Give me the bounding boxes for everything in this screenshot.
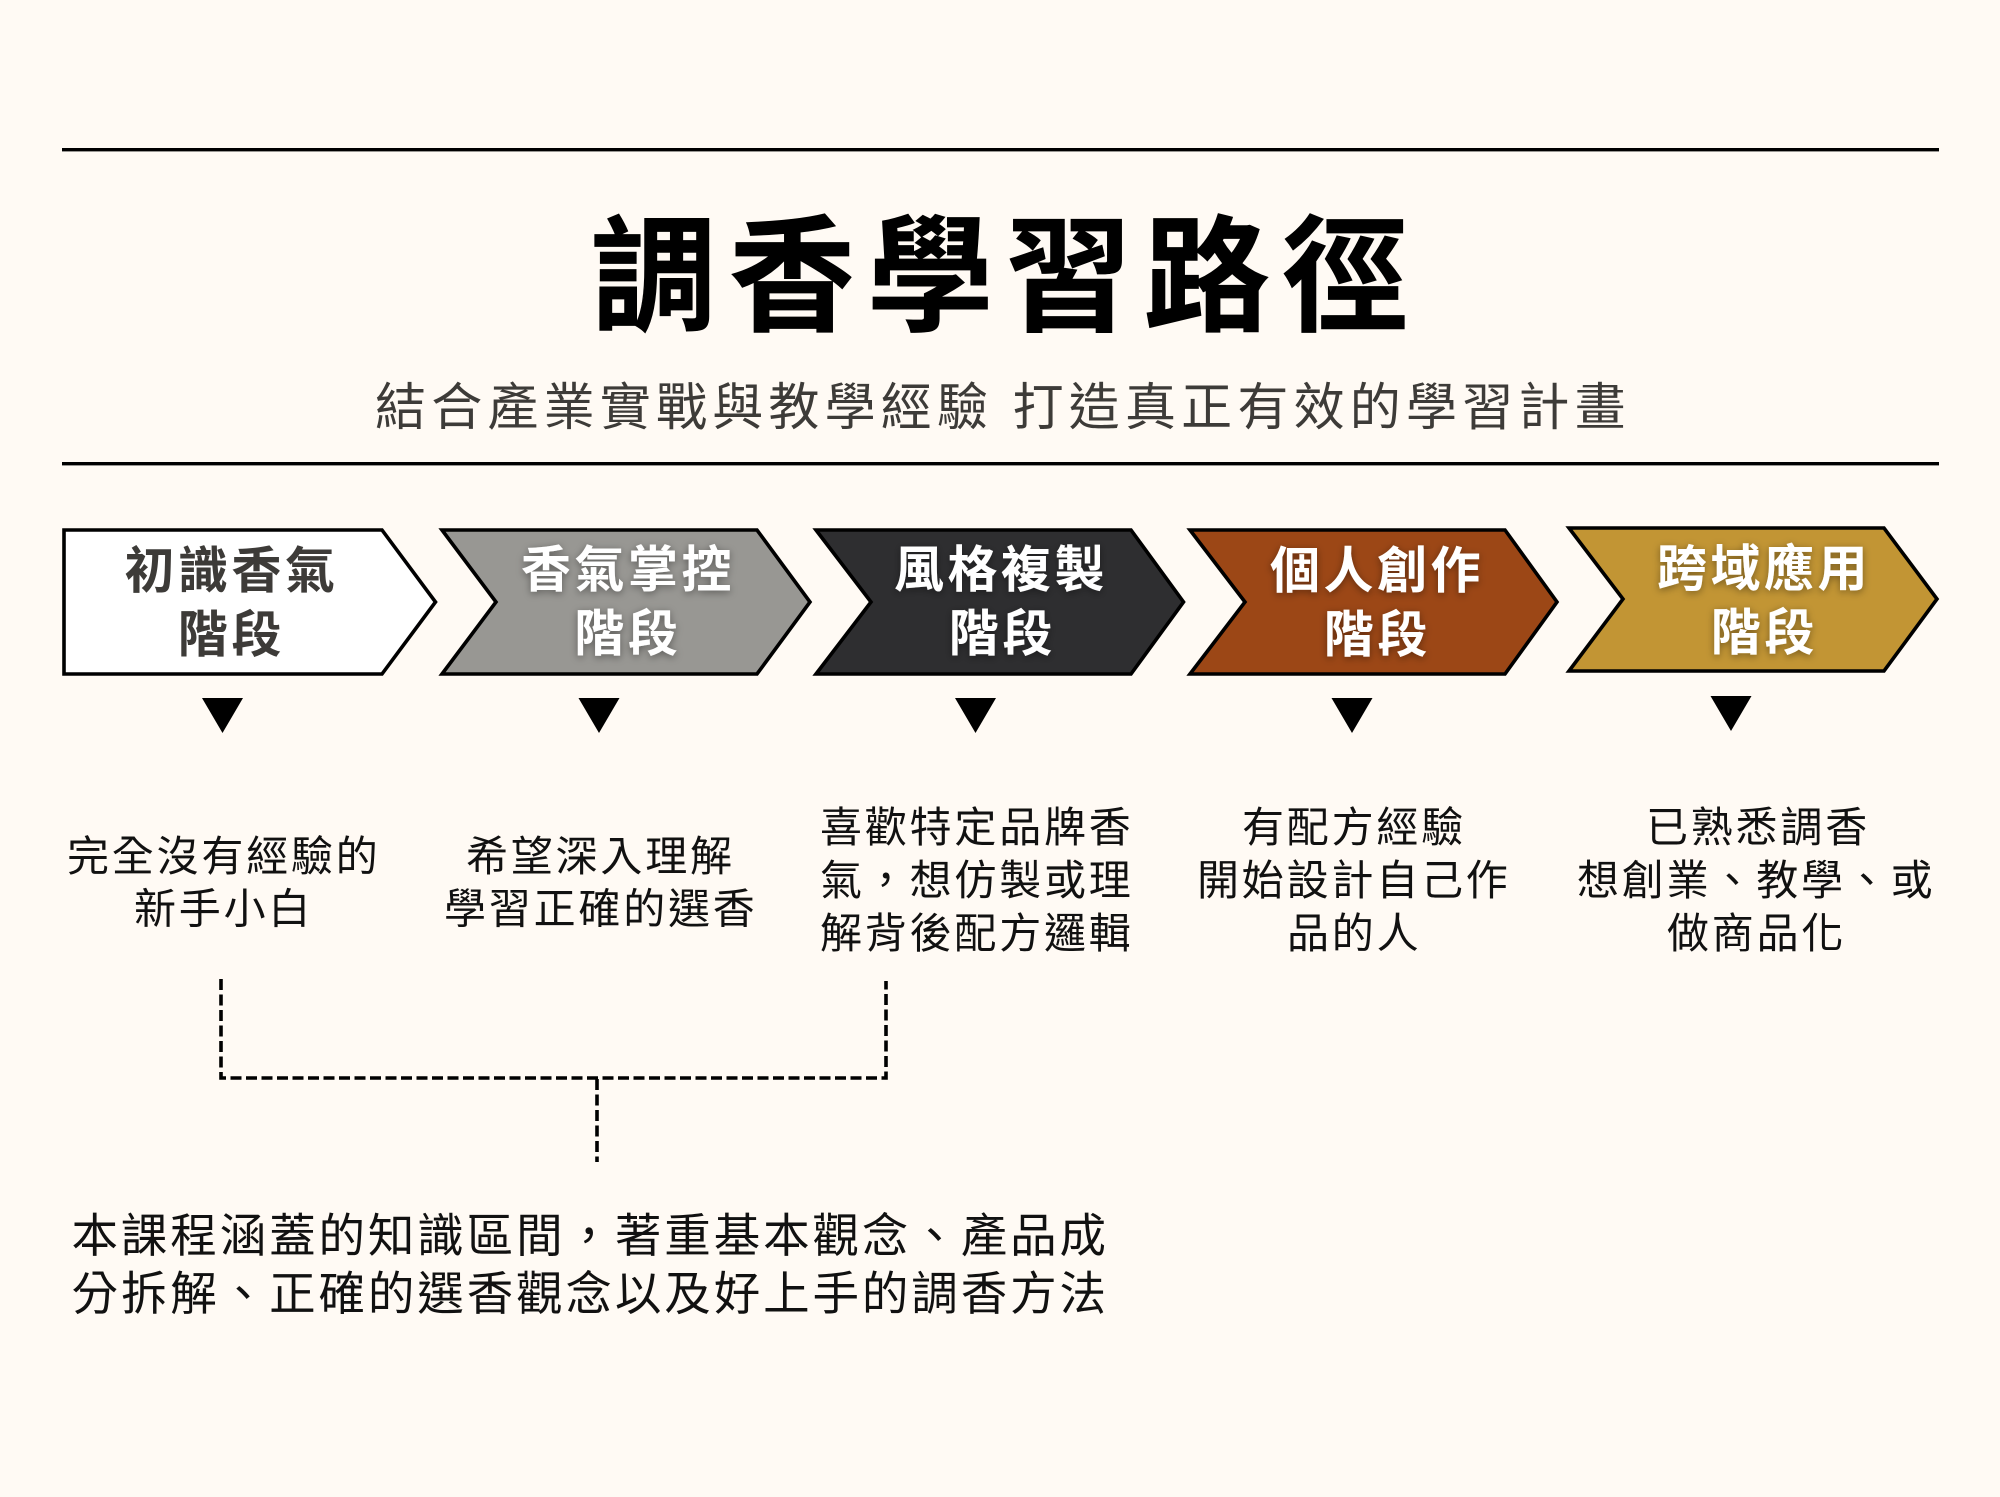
stage 1: beginner chevron: 初識香氣	[124, 543, 338, 599]
stage 3: style replication chevron: 風格複製	[894, 542, 1108, 598]
description: stage 2: 學習正確的選香	[444, 886, 758, 932]
stage 5: cross-domain application chevron: 跨域應用	[1657, 541, 1871, 597]
stage 4: personal creation chevron: 階段	[1324, 607, 1431, 663]
description: stage 1: 完全沒有經驗的	[67, 833, 381, 880]
stage 3: style replication chevron	[816, 530, 1184, 674]
description: stage 3: 喜歡特定品牌香	[820, 804, 1134, 851]
title: 調香學習路徑	[591, 207, 1420, 348]
description: stage 5: 做商品化	[1667, 910, 1846, 957]
description: stage 1	[67, 833, 381, 932]
course coverage note	[72, 1210, 1109, 1320]
stage 2: fragrance control chevron	[442, 530, 810, 674]
description: stage 4: 有配方經驗	[1242, 804, 1466, 851]
stage 5: cross-domain application chevron	[1569, 528, 1937, 671]
description: stage 5: 想創業、教學、或	[1577, 857, 1935, 904]
description: stage 5: 已熟悉調香	[1646, 804, 1870, 851]
description: stage 5	[1577, 804, 1935, 957]
description: stage 1: 新手小白	[134, 886, 313, 932]
stage 3: style replication chevron: 階段	[949, 606, 1056, 662]
stage 2: fragrance control chevron: 階段	[574, 606, 682, 662]
description: stage 2: 希望深入理解	[466, 833, 735, 880]
down arrow 5	[1710, 696, 1752, 731]
down arrow 3	[955, 698, 996, 733]
stage 4: personal creation chevron: 個人創作	[1270, 543, 1484, 599]
description: stage 2	[444, 833, 758, 932]
stage 4: personal creation chevron	[1190, 530, 1557, 674]
description: stage 3	[820, 804, 1134, 957]
stage 1: beginner chevron: 階段	[178, 607, 285, 663]
description: stage 3: 解背後配方邏輯	[820, 910, 1134, 957]
subtitle: 結合產業實戰與教學經驗 打造真正有效的學習計畫	[375, 379, 1631, 436]
description: stage 4: 開始設計自己作	[1197, 857, 1511, 904]
course coverage note: 本課程涵蓋的知識區間，著重基本觀念、產品成	[72, 1210, 1109, 1262]
description: stage 4: 品的人	[1287, 910, 1421, 957]
down arrow 2	[578, 698, 620, 733]
down arrow 1	[202, 698, 243, 733]
stage 2: fragrance control chevron: 香氣掌控	[521, 542, 735, 598]
course coverage note: 分拆解、正確的選香觀念以及好上手的調香方法	[72, 1268, 1109, 1320]
stage 5: cross-domain application chevron: 階段	[1711, 605, 1818, 661]
description: stage 3: 氣，想仿製或理	[820, 857, 1134, 904]
down arrow 4	[1332, 698, 1372, 733]
description: stage 4	[1197, 804, 1511, 957]
stage 1: beginner chevron	[64, 530, 436, 674]
dashed bracket connector	[221, 979, 886, 1162]
